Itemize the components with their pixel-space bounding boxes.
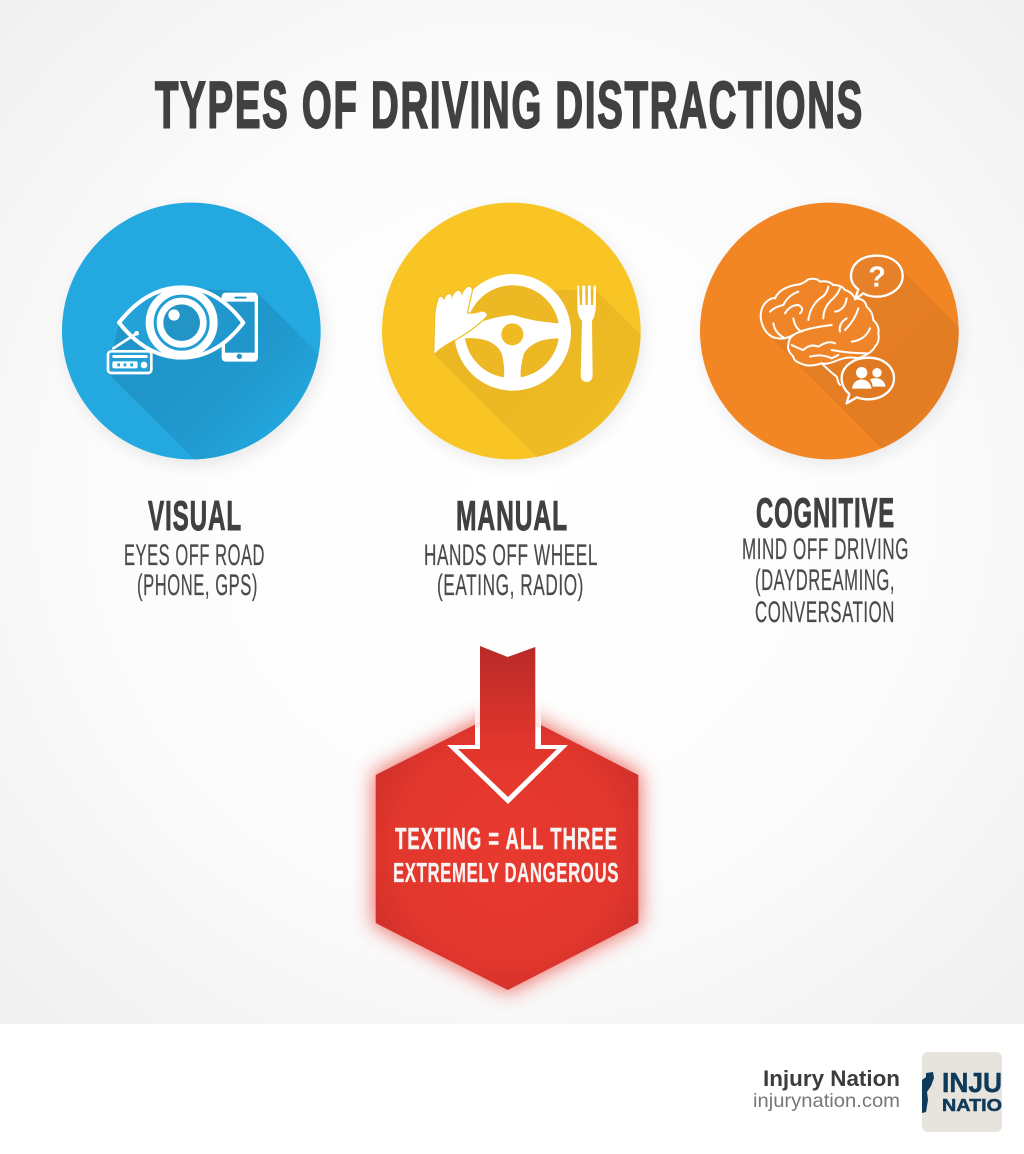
- panel: cognitive: [700, 202, 962, 622]
- heading: visual: VISUAL: [148, 492, 242, 539]
- footer: [753, 1052, 1002, 1132]
- callout: texting hexagon: [376, 646, 638, 990]
- panel: visual: [62, 202, 325, 602]
- text: phone, gps: (PHONE, GPS): [137, 569, 258, 602]
- brand url: injurynation.com: [753, 1090, 900, 1112]
- icon: cognitive circle with brain and speech bubbles: ?: [868, 262, 886, 294]
- heading: manual: MANUAL: [456, 492, 568, 539]
- icon: visual circle with eye, phone and radio: [62, 202, 325, 467]
- panel: manual: [382, 202, 644, 602]
- text: texting all three: TEXTING = ALL THREE: [395, 821, 618, 856]
- logo: NATIO: [942, 1095, 1002, 1115]
- logo: INJU: [942, 1067, 1002, 1098]
- text: extremely dangerous: EXTREMELY DANGEROUS: [393, 857, 619, 888]
- text: eating, radio: (EATING, RADIO): [437, 569, 584, 602]
- text: eyes off road: EYES OFF ROAD: [124, 539, 265, 572]
- text: conversation: CONVERSATION: [755, 596, 895, 629]
- brand name: Injury Nation: [763, 1066, 900, 1091]
- icon: cognitive circle with brain and speech bubbles: [700, 202, 962, 466]
- text: hands off wheel: HANDS OFF WHEEL: [424, 539, 598, 572]
- heading: cognitive: COGNITIVE: [756, 489, 895, 536]
- icon: manual circle with hand, steering wheel and fork: [382, 202, 644, 466]
- arrow: pointing down into hexagon: [447, 646, 568, 804]
- text: daydreaming: (DAYDREAMING,: [755, 564, 895, 597]
- logo: [922, 1052, 1002, 1132]
